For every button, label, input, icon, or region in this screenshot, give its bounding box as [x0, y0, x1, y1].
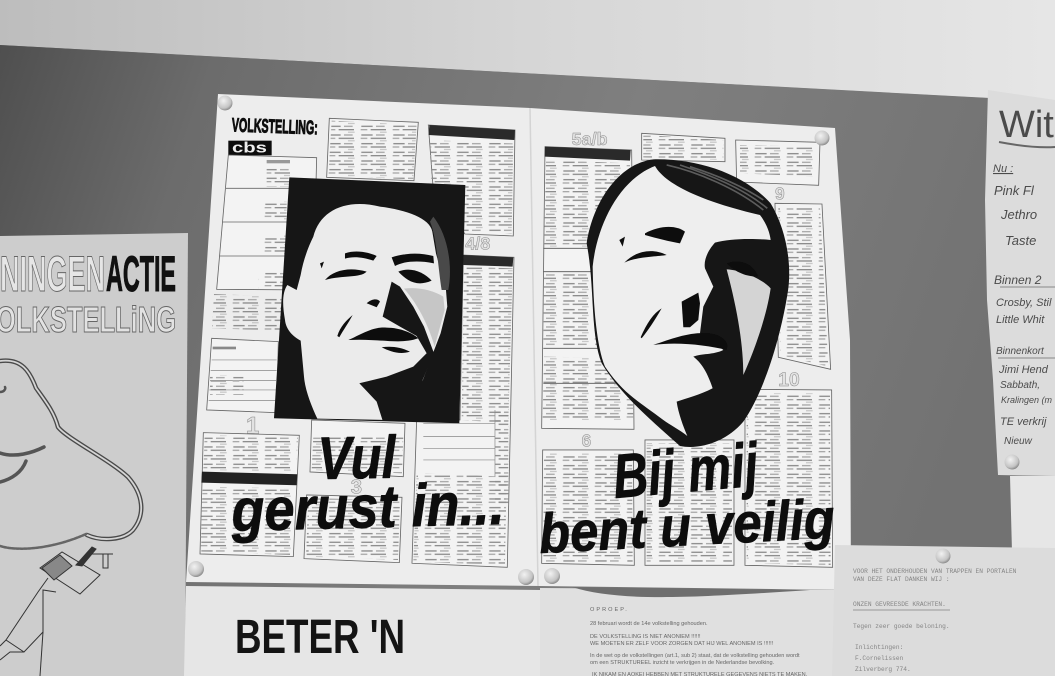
form: table 1 with dark bar — [200, 433, 299, 557]
slogan: Bij mij bent u veilig: Bij mij — [610, 430, 762, 512]
form: centre lower — [645, 440, 734, 565]
panel: handwritten music note top right: Wit — [999, 104, 1054, 146]
typed text: ONZEN GEVREESDE KRACHTEN. — [853, 601, 946, 608]
panel: handwritten music note top right: Kralingen (m — [1001, 395, 1053, 405]
pin — [1004, 454, 1020, 470]
panel: handwritten music note top right: Binnenkort — [996, 346, 1045, 357]
cut-out face: portrait with painted moustache and hair — [587, 159, 789, 447]
right side shading of face and neck — [359, 282, 434, 421]
panel: poster BETER 'N: BETER 'N — [235, 611, 405, 664]
panel: handwritten music note top right: Binnen 2 — [994, 273, 1042, 287]
shadow under poster — [572, 587, 810, 597]
panel: handwritten music note top right: Nu : — [993, 163, 1013, 175]
notice text: In de wet op de volkstellingen (art.1, sub 2) staat, dat de volkstelling gehouden wordt — [590, 653, 800, 659]
panel: handwritten music note top right: Jimi Hend — [998, 364, 1049, 376]
centre fold of the sheet — [530, 108, 538, 586]
form: questionnaire A — [217, 155, 317, 290]
typed text: Tegen zeer goede beloning. — [853, 623, 950, 630]
number 9: 9 — [775, 183, 785, 203]
panel: handwritten music note top right: Pink Fl — [994, 183, 1035, 198]
panel: handwritten music note top right: TE verkrij — [1000, 416, 1047, 428]
form: left lower — [542, 450, 634, 565]
pins of main poster — [188, 96, 830, 585]
slogan: Vul gerust in... — [230, 424, 505, 544]
lit patch on shaded cheek — [727, 269, 771, 375]
form: right middle — [775, 203, 831, 369]
notice text: DE VOLKSTELLING IS NIET ANONIEM !!!!!! — [590, 634, 701, 640]
panel: Oproep notice — [540, 587, 836, 676]
panel: left poster "Woningenactie volkstelling" — [0, 233, 188, 676]
panel: handwritten music note top right — [985, 90, 1055, 476]
slogan: Vul gerust in...: gerust in... — [230, 470, 505, 544]
form: right column — [412, 255, 514, 567]
face light area — [593, 166, 771, 436]
right half forms — [542, 129, 833, 567]
panel: left poster "Woningenactie volkstelling": ACTIE — [106, 246, 176, 302]
panel: handwritten music note top right: Little Whit — [996, 314, 1045, 326]
slogan: Bij mij bent u veilig: bent u veilig — [537, 487, 836, 565]
panel: handwritten music note top right: Crosby, Stil — [996, 297, 1052, 309]
typed text — [853, 568, 1017, 673]
slogan: Bij mij bent u veilig — [537, 430, 836, 565]
notice text: 28 februari wordt de 14e volkstelling gehouden. — [590, 621, 708, 627]
form: top right with dark header — [428, 125, 515, 236]
face light area — [283, 204, 447, 421]
features — [320, 251, 434, 353]
form: right lower — [745, 389, 833, 567]
logo: cbs — [228, 141, 272, 157]
pin — [936, 548, 950, 564]
number 10: 10 — [778, 370, 800, 391]
panel: poster BETER 'N — [184, 586, 540, 676]
wall above the notice board — [0, 0, 1055, 105]
text block: middle left — [212, 294, 282, 331]
notice text: om een STRUKTUREEL inzicht te verkrijgen in de Nederlandse bevolking. — [590, 660, 775, 666]
panel: typed notice bottom right — [832, 476, 1055, 676]
panel: main census poster sheet — [186, 94, 851, 590]
form: centre bottom — [304, 495, 402, 563]
panel: handwritten music note top right: Taste — [1005, 233, 1036, 248]
form: top right — [736, 140, 820, 185]
form: lower left — [207, 338, 278, 413]
typed text: F.Cornelissen — [855, 655, 904, 662]
features — [619, 227, 758, 350]
heading: woningenactie: NINGEN — [0, 246, 105, 302]
notice text: OPROEP. — [590, 607, 629, 613]
logo: cbs: cbs — [232, 141, 267, 157]
number 6: 6 — [582, 431, 592, 451]
form: left column with dark header — [542, 147, 634, 429]
drawing: hand filling in a form on a clipboard — [0, 547, 113, 676]
drawing: cartoon head outline — [0, 361, 141, 549]
left half forms — [200, 115, 515, 567]
notice text: WE MOETEN ER ZELF VOOR ZORGEN DAT HIJ WEL ANONIEM IS !!!!!! — [590, 641, 774, 647]
lit patch beside the eye — [404, 288, 445, 347]
panel: handwritten music note top right: Jethro — [1000, 207, 1037, 222]
photo: portrait of the census official — [274, 177, 465, 423]
form: top centre — [327, 118, 418, 181]
heading: volkstelling: VOLKSTELLING: — [231, 115, 318, 139]
number 1: 1 — [246, 412, 259, 439]
typed text: Zilverberg 774. — [855, 666, 911, 673]
number 5a/b: 5a/b — [572, 129, 608, 149]
panel: handwritten music note top right: Sabbath, — [1000, 380, 1040, 391]
heading: volkstelling: OLKSTELLiNG — [0, 299, 176, 340]
hair tone on the right — [430, 217, 450, 290]
hair highlights — [667, 165, 767, 210]
form: top centre — [642, 133, 725, 162]
typed text: VOOR HET ONDERHOUDEN VAN TRAPPEN EN PORTALEN — [853, 568, 1017, 575]
slogan: Vul gerust in...: Vul — [317, 424, 397, 492]
form: centre lower — [310, 420, 405, 477]
number 3: 3 — [351, 475, 362, 498]
notice text — [590, 607, 808, 676]
number 4/8 fragment: 4/8 — [465, 233, 490, 253]
typed text: VAN DEZE FLAT DANKEN WIJ : — [853, 576, 950, 583]
panel: handwritten music note top right: Nieuw — [1004, 436, 1033, 447]
typed text: Inlichtingen: — [855, 644, 903, 651]
